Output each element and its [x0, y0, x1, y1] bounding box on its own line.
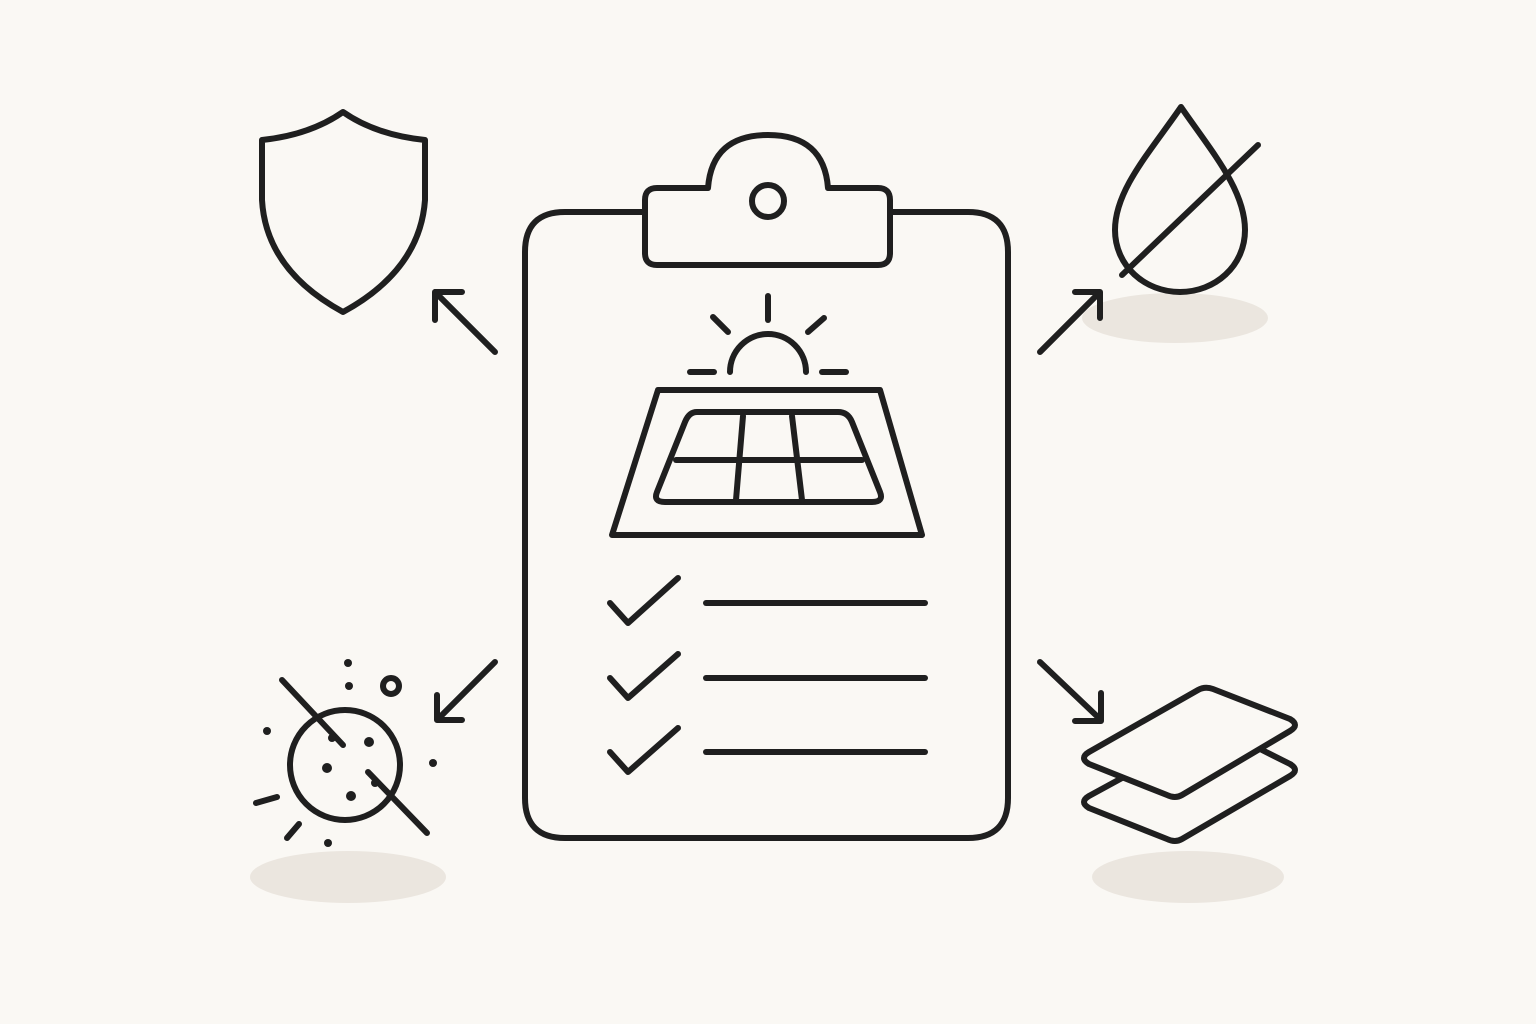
- clipboard board: [525, 212, 1008, 838]
- arrow: to dust: [437, 662, 495, 720]
- arrow: to layers: [1040, 662, 1101, 721]
- arrow: to shield: [435, 292, 495, 352]
- icon: solar panel with sun: [612, 296, 922, 535]
- arrow: to drop: [1040, 292, 1100, 352]
- checklist: [610, 578, 925, 772]
- clipboard: [525, 135, 1008, 838]
- icon: no dust: [250, 659, 446, 903]
- icon: no water drop: [1082, 107, 1268, 343]
- clipboard clip: [645, 135, 890, 265]
- icon: layers: [1084, 688, 1295, 903]
- icon: shield: [262, 112, 425, 312]
